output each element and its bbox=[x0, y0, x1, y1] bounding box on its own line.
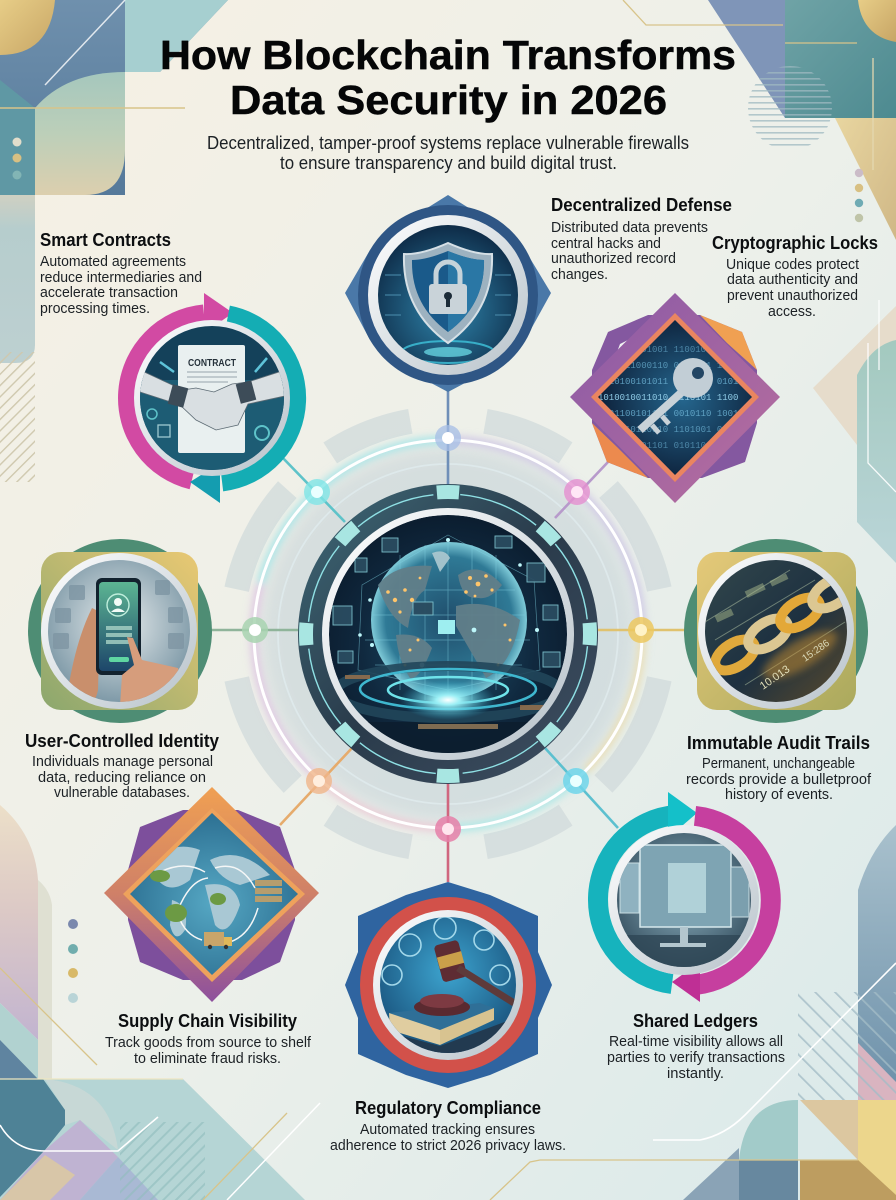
icon: warehouse rack bbox=[255, 880, 282, 902]
badge: Cryptographic Locks: 1001010110010 1101001 0110 bbox=[598, 425, 738, 435]
badge: Cryptographic Locks: 0100110101001 1100101 0110 bbox=[598, 345, 738, 355]
badge: Cryptographic Locks bbox=[570, 293, 780, 503]
decorative right-side shapes bbox=[813, 300, 896, 563]
hub outer grey segments bbox=[232, 418, 664, 850]
text: User-Controlled Identity: data, reducing reliance on bbox=[38, 769, 206, 786]
text: Supply Chain Visibility: Supply Chain Visibility bbox=[118, 1010, 298, 1031]
badge: Smart Contracts bbox=[128, 293, 296, 503]
text: Regulatory Compliance bbox=[330, 1097, 566, 1154]
text: Decentralized Defense: Decentralized Defense bbox=[551, 194, 732, 215]
badge: Cryptographic Locks: 0110100101011 1001010 0101 bbox=[598, 377, 738, 387]
text: Cryptographic Locks: Unique codes protect bbox=[726, 256, 860, 273]
badge: Supply Chain Visibility bbox=[104, 787, 319, 1002]
badge: Cryptographic Locks: 0110101001101 0101100 1010 bbox=[598, 441, 738, 451]
badge: Cryptographic Locks: 1001011000110 0101001 1010 bbox=[598, 361, 738, 371]
hub bright ring bbox=[254, 440, 642, 828]
text: Shared Ledgers: Shared Ledgers bbox=[633, 1010, 758, 1031]
text: Shared Ledgers: instantly. bbox=[667, 1065, 724, 1082]
text: Decentralized Defense: unauthorized record bbox=[551, 250, 676, 267]
connector lines bbox=[210, 385, 686, 882]
text: Immutable Audit Trails: history of events. bbox=[725, 786, 833, 803]
text: Cryptographic Locks: access. bbox=[768, 303, 816, 320]
text: Immutable Audit Trails: Immutable Audit Trails bbox=[687, 732, 870, 753]
icon: pink circular arrow bbox=[128, 293, 233, 480]
text: Regulatory Compliance: Automated tracking ensures bbox=[360, 1121, 535, 1138]
text: Smart Contracts bbox=[40, 229, 202, 317]
text: Shared Ledgers: parties to verify transactions bbox=[607, 1049, 785, 1066]
decorative corner shapes: bottom left bbox=[0, 805, 320, 1200]
book bbox=[389, 1003, 506, 1053]
subtitle: to ensure transparency and build digital trust. bbox=[280, 152, 617, 173]
badge: Cryptographic Locks: 1010010011010 0110101 1100 bbox=[598, 393, 738, 403]
globe city lights bbox=[386, 574, 512, 666]
decorative corner shapes: bottom right bbox=[490, 825, 896, 1200]
text: Regulatory Compliance: Regulatory Compliance bbox=[355, 1097, 541, 1118]
globe central block bbox=[438, 620, 455, 634]
hub: radial ring system bbox=[210, 385, 686, 882]
text: Smart Contracts: Automated agreements bbox=[40, 253, 186, 270]
hub inner pale arcs bbox=[278, 464, 618, 804]
globe grid bbox=[358, 535, 540, 700]
hub ring light tabs bbox=[295, 481, 601, 787]
central globe illustration bbox=[329, 515, 567, 760]
hub soft halo bbox=[260, 446, 636, 822]
icon: gavel bbox=[414, 940, 514, 1016]
text: Smart Contracts: accelerate transaction bbox=[40, 284, 178, 301]
text: Regulatory Compliance: adherence to strict 2026 privacy laws. bbox=[330, 1137, 566, 1154]
text: Immutable Audit Trails bbox=[686, 732, 872, 803]
text: User-Controlled Identity bbox=[25, 730, 220, 801]
badge: Cryptographic Locks: 0101100101101 0010110 1001 bbox=[598, 409, 738, 419]
text: Shared Ledgers: Real-time visibility allows all bbox=[609, 1033, 783, 1050]
text: Supply Chain Visibility: Track goods from source to shelf bbox=[105, 1034, 312, 1051]
robot handshake bbox=[140, 370, 285, 430]
text: Cryptographic Locks: Cryptographic Locks bbox=[712, 232, 878, 253]
title bbox=[160, 32, 736, 123]
text: Cryptographic Locks: data authenticity and bbox=[727, 271, 858, 288]
text: Supply Chain Visibility bbox=[105, 1010, 312, 1067]
badge: Smart Contracts: CONTRACT bbox=[188, 358, 236, 369]
node dots bbox=[242, 425, 654, 842]
globe continents bbox=[378, 551, 520, 678]
text: Decentralized Defense: central hacks and bbox=[551, 235, 661, 252]
badge: Decentralized Defense bbox=[345, 195, 551, 392]
icon: smartphone bbox=[96, 578, 141, 675]
decorative corner shapes: top right bbox=[623, 0, 896, 240]
globe floating data cards bbox=[333, 536, 560, 667]
text: Decentralized Defense bbox=[551, 194, 732, 283]
icon: silver key bbox=[640, 358, 713, 433]
text: User-Controlled Identity: User-Controlled Identity bbox=[25, 730, 220, 751]
text: Cryptographic Locks: prevent unauthorized bbox=[727, 287, 858, 304]
icon: shield with padlock bbox=[404, 243, 492, 343]
text: User-Controlled Identity: vulnerable databases. bbox=[54, 784, 190, 801]
text: Shared Ledgers bbox=[607, 1010, 785, 1082]
hub white bezel bbox=[322, 508, 574, 760]
text: Decentralized Defense: changes. bbox=[551, 266, 608, 283]
badge: Immutable Audit Trails: 10.013 bbox=[758, 663, 792, 692]
hub ring tech arcs bbox=[296, 482, 600, 786]
hub glow ring bbox=[254, 440, 642, 828]
text: Supply Chain Visibility: to eliminate fraud risks. bbox=[134, 1050, 281, 1067]
icon: teal circular arrow bbox=[190, 316, 296, 503]
badge: Immutable Audit Trails: 15:286 bbox=[800, 638, 832, 664]
route arcs bbox=[160, 866, 258, 942]
subtitle bbox=[207, 132, 689, 173]
text: Cryptographic Locks bbox=[712, 232, 878, 320]
text: Smart Contracts: Smart Contracts bbox=[40, 229, 171, 250]
icon: pink circular arrow bbox=[672, 816, 771, 1002]
badge: Regulatory Compliance bbox=[345, 882, 552, 1088]
icon: gold chain bbox=[710, 578, 842, 676]
decorative corner shapes: top left bbox=[0, 0, 228, 482]
text: Smart Contracts: processing times. bbox=[40, 300, 150, 317]
text: Immutable Audit Trails: records provide a bulletproof bbox=[686, 771, 872, 788]
badge: User-Controlled Identity bbox=[28, 539, 212, 723]
text: Smart Contracts: reduce intermediaries and bbox=[40, 269, 202, 286]
subtitle: Decentralized, tamper-proof systems replace vulnerable firewalls bbox=[207, 132, 689, 153]
icon: teal circular arrow bbox=[598, 792, 697, 984]
icon: delivery truck bbox=[204, 932, 232, 949]
badge: Immutable Audit Trails bbox=[684, 539, 868, 723]
text: Immutable Audit Trails: Permanent, unchangeable bbox=[702, 755, 855, 772]
title: Data Security in 2026 bbox=[230, 77, 667, 123]
text: Decentralized Defense: Distributed data prevents bbox=[551, 219, 708, 236]
hub dark ring bbox=[298, 484, 598, 784]
title: How Blockchain Transforms bbox=[160, 32, 736, 78]
icon: glass monitors bbox=[620, 845, 749, 947]
text: User-Controlled Identity: Individuals manage personal bbox=[32, 753, 213, 770]
holographic platform bbox=[368, 722, 528, 753]
badge: Shared Ledgers bbox=[598, 792, 771, 1002]
globe network nodes bbox=[358, 538, 539, 667]
